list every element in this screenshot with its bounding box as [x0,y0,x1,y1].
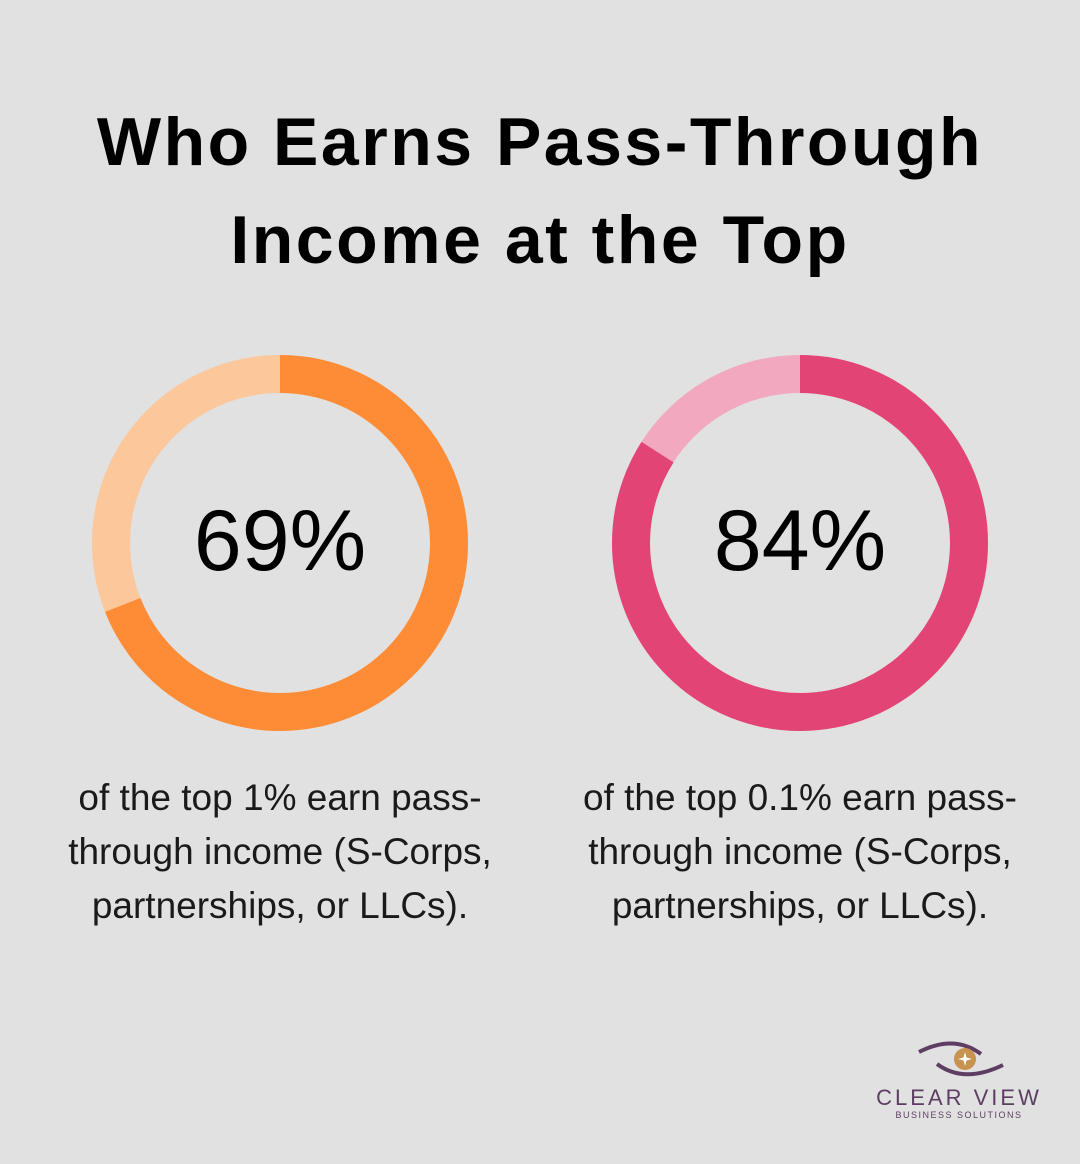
title: Income at the Top [230,202,850,278]
logo: Clear View: CLEAR VIEW [876,1085,1042,1110]
donut chart: 84% [612,355,988,731]
logo: Clear View [876,1042,1042,1120]
donut chart: 69% [92,355,468,731]
title: Who Earns Pass-Through [97,104,983,180]
stat: 84%: 84% [714,493,886,589]
caption: top 1%: of the top 1% earn pass-through income (S-Corps, partnerships, or LLCs). [68,777,492,926]
caption: top 0.1%: of the top 0.1% earn pass-through income (S-Corps, partnerships, or LLCs). [583,777,1017,926]
logo: Clear View: BUSINESS SOLUTIONS [895,1110,1023,1120]
title [97,104,983,278]
stat: 69%: 69% [194,493,366,589]
